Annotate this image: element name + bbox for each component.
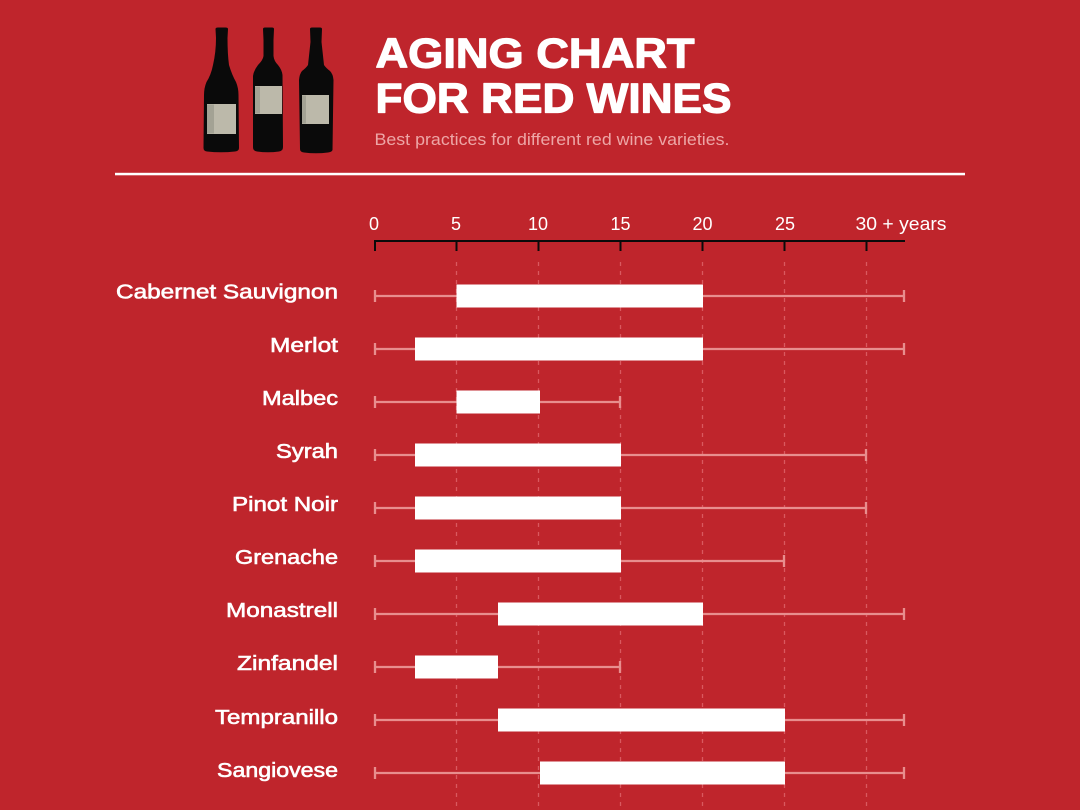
row: Cabernet Sauvignon: Cabernet Sauvignon [116, 280, 338, 304]
row: Zinfandel: Zinfandel [237, 652, 338, 675]
row: Syrah: Syrah [276, 440, 338, 463]
axis labels: 25 [775, 214, 795, 234]
axis labels: 5 [451, 214, 461, 234]
row: Sangiovese: Sangiovese [217, 759, 338, 782]
title: AGING CHART [376, 30, 695, 76]
row: Tempranillo [215, 706, 904, 732]
row: Malbec [262, 387, 620, 414]
axis labels: 0 [369, 214, 379, 234]
row: Grenache [235, 546, 784, 572]
row: Pinot Noir [232, 493, 866, 520]
axis labels: 15 [610, 214, 631, 234]
axis [374, 240, 905, 251]
row: Sangiovese [217, 759, 904, 784]
gridlines [456, 262, 866, 810]
row: Pinot Noir: Pinot Noir [232, 493, 338, 516]
row: Merlot: Merlot [270, 334, 338, 357]
row: Monastrell [226, 599, 904, 626]
row: Cabernet Sauvignon [116, 280, 904, 308]
row: Zinfandel [237, 652, 620, 678]
title: FOR RED WINES [376, 74, 732, 122]
icon: bottle 2 [253, 28, 283, 152]
row: Tempranillo: Tempranillo [215, 706, 338, 729]
row: Syrah [276, 440, 866, 466]
row: Monastrell: Monastrell [226, 599, 338, 622]
row: Grenache: Grenache [235, 546, 338, 569]
axis labels: 10 [528, 214, 548, 234]
axis labels: 20 [692, 214, 713, 234]
row: Merlot [270, 334, 904, 360]
icon: bottle 3 [299, 28, 334, 153]
icon: three wine bottles [204, 28, 334, 153]
subtitle: Best practices for different red wine varieties. [374, 131, 730, 149]
icon: bottle 1 [204, 28, 239, 152]
row: Malbec: Malbec [262, 387, 338, 410]
axis labels [369, 214, 946, 234]
axis labels: 30 + years [856, 214, 946, 234]
